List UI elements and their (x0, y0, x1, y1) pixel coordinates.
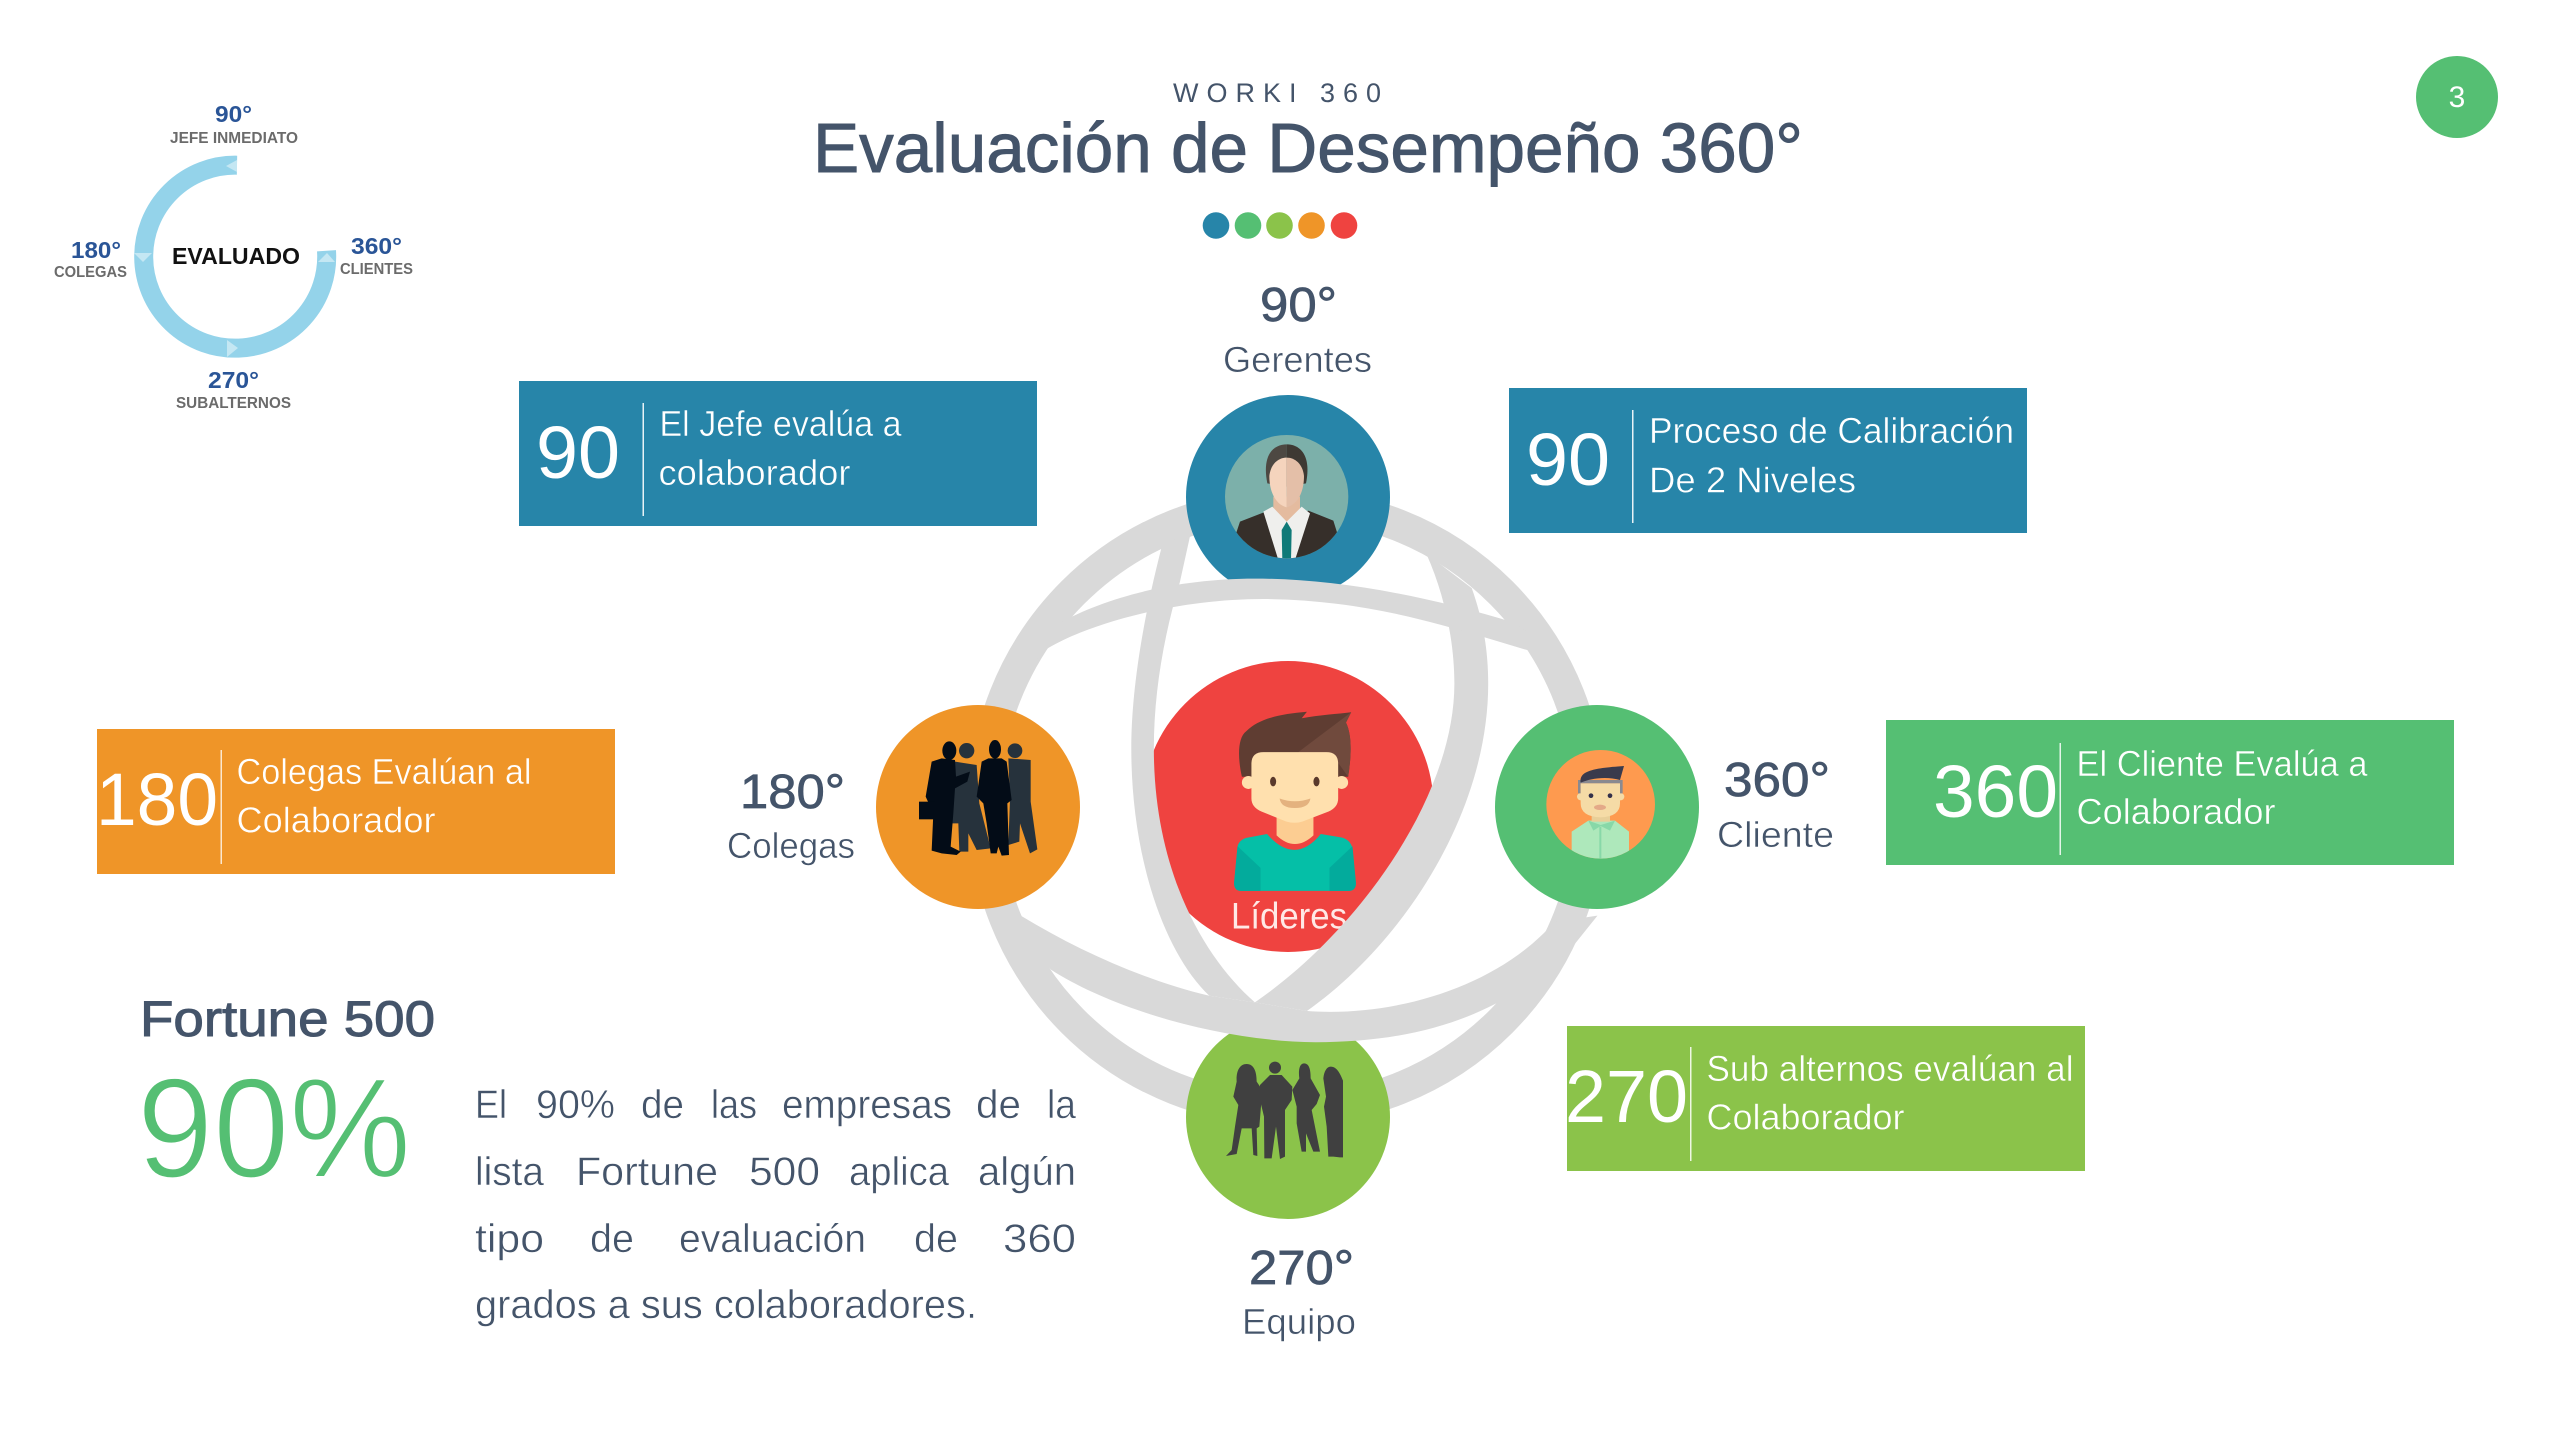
text block: Fortune 500 description: El (475, 1083, 507, 1127)
text block: Fortune 500 description: 360 (1003, 1217, 1076, 1261)
logo label 90: 90° (215, 101, 252, 127)
colored dots (1203, 212, 1357, 239)
left vertical swoosh (1131, 529, 1255, 1002)
diagram: 360 network (876, 395, 1699, 1219)
logo center label: EVALUADO (172, 243, 300, 269)
label: 270 equipo: Equipo (1242, 1301, 1356, 1342)
panel: jefe evalua: El Jefe evalúa a (660, 403, 902, 444)
icon: team silhouette (1226, 1062, 1343, 1159)
eyebrow: WORKI 360: WORKI 360 (1173, 78, 1381, 108)
panel: calibracion: 90 (1526, 418, 1610, 501)
text block: Fortune 500 description: lista (475, 1150, 545, 1194)
panel: subalternos evaluan (1565, 1026, 2085, 1171)
logo label 180: 180° (71, 237, 121, 263)
ring arc (144, 165, 327, 348)
text block: Fortune 500 description (475, 1083, 1077, 1327)
text block: Fortune 500 description: 500 (749, 1150, 820, 1194)
right vertical swoosh (1255, 553, 1488, 1011)
panel: subalternos evaluan: Colaborador (1706, 1096, 1905, 1138)
page number badge: 3 (2449, 81, 2465, 114)
logo label 270: 270° (208, 367, 259, 393)
panel: cliente evalua: Colaborador (2076, 791, 2276, 832)
node: 180 colegas (876, 705, 1080, 909)
panel: calibracion: De 2 Niveles (1649, 460, 1856, 500)
node: 360 cliente (1495, 705, 1699, 909)
page number badge (2416, 56, 2498, 138)
text block: Fortune 500 description: de (590, 1217, 634, 1261)
label: 180 colegas (727, 766, 855, 866)
text block: Fortune 500 description: empresas (782, 1083, 952, 1127)
panel: subalternos evaluan: Sub alternos evalúan al (1706, 1048, 2074, 1089)
lower horizontal swoosh (1003, 916, 1597, 1042)
panel: colegas evaluan: 180 (96, 758, 218, 841)
label: 90 gerentes: 90° (1260, 279, 1337, 332)
logo label 360 (340, 233, 413, 278)
logo label 270 (176, 367, 291, 412)
panel: jefe evalua: 90 (536, 411, 620, 494)
ring arrow marks (134, 160, 335, 357)
logo label 270: SUBALTERNOS (176, 395, 291, 412)
text block: Fortune 500 description: evaluación (679, 1217, 866, 1261)
logo label 90: JEFE INMEDIATO (170, 130, 298, 147)
center circle: Líderes (1142, 661, 1434, 952)
logo label 360: 360° (351, 233, 402, 259)
heading: Fortune 500: Fortune 500 (140, 991, 435, 1047)
panel: cliente evalua: El Cliente Evalúa a (2076, 743, 2368, 784)
text block: Fortune 500 description: 90% (536, 1083, 615, 1127)
center label: Líderes (1231, 896, 1347, 936)
panel: colegas evaluan (96, 729, 615, 874)
outer gray ring (984, 504, 1590, 1110)
text block: Fortune 500 description: de (914, 1217, 958, 1261)
label: 360 cliente: 360° (1724, 754, 1830, 807)
text block: Fortune 500 description: las (711, 1083, 757, 1127)
label: 270 equipo: 270° (1249, 1242, 1354, 1295)
panel: calibracion (1509, 388, 2027, 533)
panel: cliente evalua: 360 (1933, 750, 2058, 833)
text block: Fortune 500 description: Fortune (576, 1150, 718, 1194)
logo label 180 (54, 237, 127, 281)
label: 360 cliente: Cliente (1717, 814, 1834, 855)
icon: client avatar (1546, 750, 1655, 860)
upper horizontal swoosh (1003, 579, 1543, 705)
panel: calibracion: Proceso de Calibración (1649, 410, 2014, 451)
label: 270 equipo (1242, 1242, 1356, 1342)
logo label 90 (170, 101, 298, 147)
text block: Fortune 500 description: aplica (849, 1150, 950, 1194)
logo label 180: COLEGAS (54, 264, 127, 281)
text block: Fortune 500 description: la (1047, 1083, 1077, 1127)
title: Evaluación de Desempeño 360° (813, 109, 1803, 187)
panel: subalternos evaluan: 270 (1565, 1055, 1688, 1138)
logo label 360: CLIENTES (340, 261, 413, 278)
panel: colegas evaluan: Colaborador (236, 800, 436, 840)
label: 180 colegas: Colegas (727, 825, 855, 866)
node: 270 equipo (1186, 1015, 1390, 1219)
icon: boy avatar (1234, 712, 1356, 891)
text block: Fortune 500 description: de (976, 1083, 1021, 1127)
text block: Fortune 500 description: grados a sus colaboradores. (475, 1283, 977, 1327)
logo: evaluado ring diagram (54, 101, 413, 412)
label: 360 cliente (1717, 754, 1834, 855)
stat: 90%: 90% (137, 1049, 411, 1208)
text block: Fortune 500 description: algún (978, 1150, 1076, 1194)
label: 90 gerentes (1223, 279, 1372, 380)
text block: Fortune 500 description: tipo (475, 1217, 544, 1261)
label: 90 gerentes: Gerentes (1223, 339, 1372, 380)
icon: colleagues silhouette (919, 740, 1037, 856)
label: 180 colegas: 180° (740, 766, 845, 819)
panel: cliente evalua (1886, 720, 2454, 865)
panel: colegas evaluan: Colegas Evalúan al (236, 751, 532, 792)
text block: Fortune 500 description: de (641, 1083, 684, 1127)
node: 90 gerentes (1186, 395, 1390, 599)
panel: jefe evalua (519, 381, 1037, 526)
icon: manager avatar (1225, 435, 1348, 567)
panel: jefe evalua: colaborador (658, 452, 851, 493)
